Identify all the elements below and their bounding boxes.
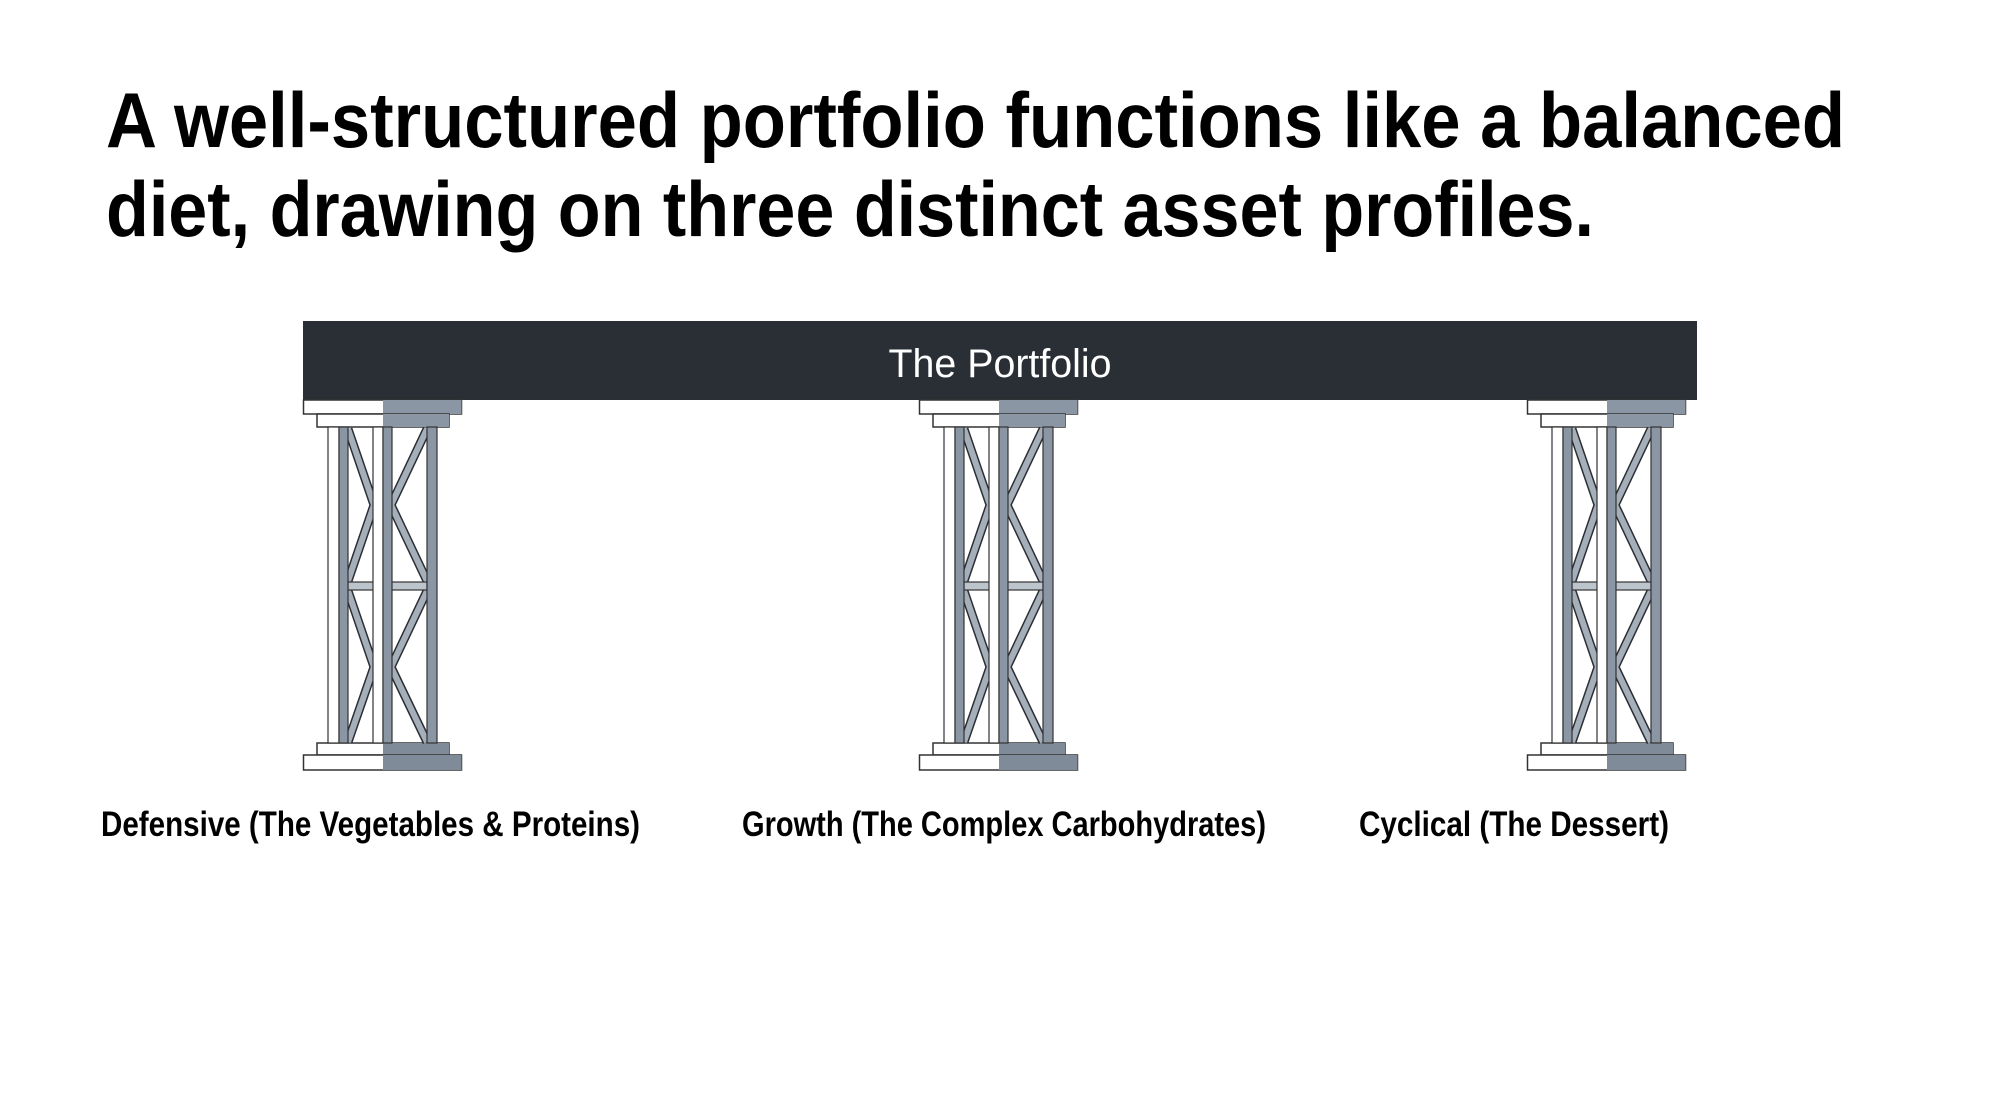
pillar: cyclical bbox=[1528, 400, 1686, 770]
title: A well-structured portfolio functions like a balanced bbox=[106, 76, 1845, 164]
label: growth: Growth (The Complex Carbohydrates) bbox=[742, 805, 1266, 844]
label: defensive: Defensive (The Vegetables & Proteins) bbox=[101, 805, 640, 844]
title: diet, drawing on three distinct asset profiles. bbox=[106, 165, 1594, 253]
pillar: defensive bbox=[304, 400, 462, 770]
label: cyclical: Cyclical (The Dessert) bbox=[1359, 805, 1669, 844]
title bbox=[106, 76, 1845, 253]
beam: The Portfolio bbox=[303, 321, 1697, 400]
beam: The Portfolio: The Portfolio bbox=[888, 342, 1112, 386]
pillar: growth bbox=[920, 400, 1078, 770]
